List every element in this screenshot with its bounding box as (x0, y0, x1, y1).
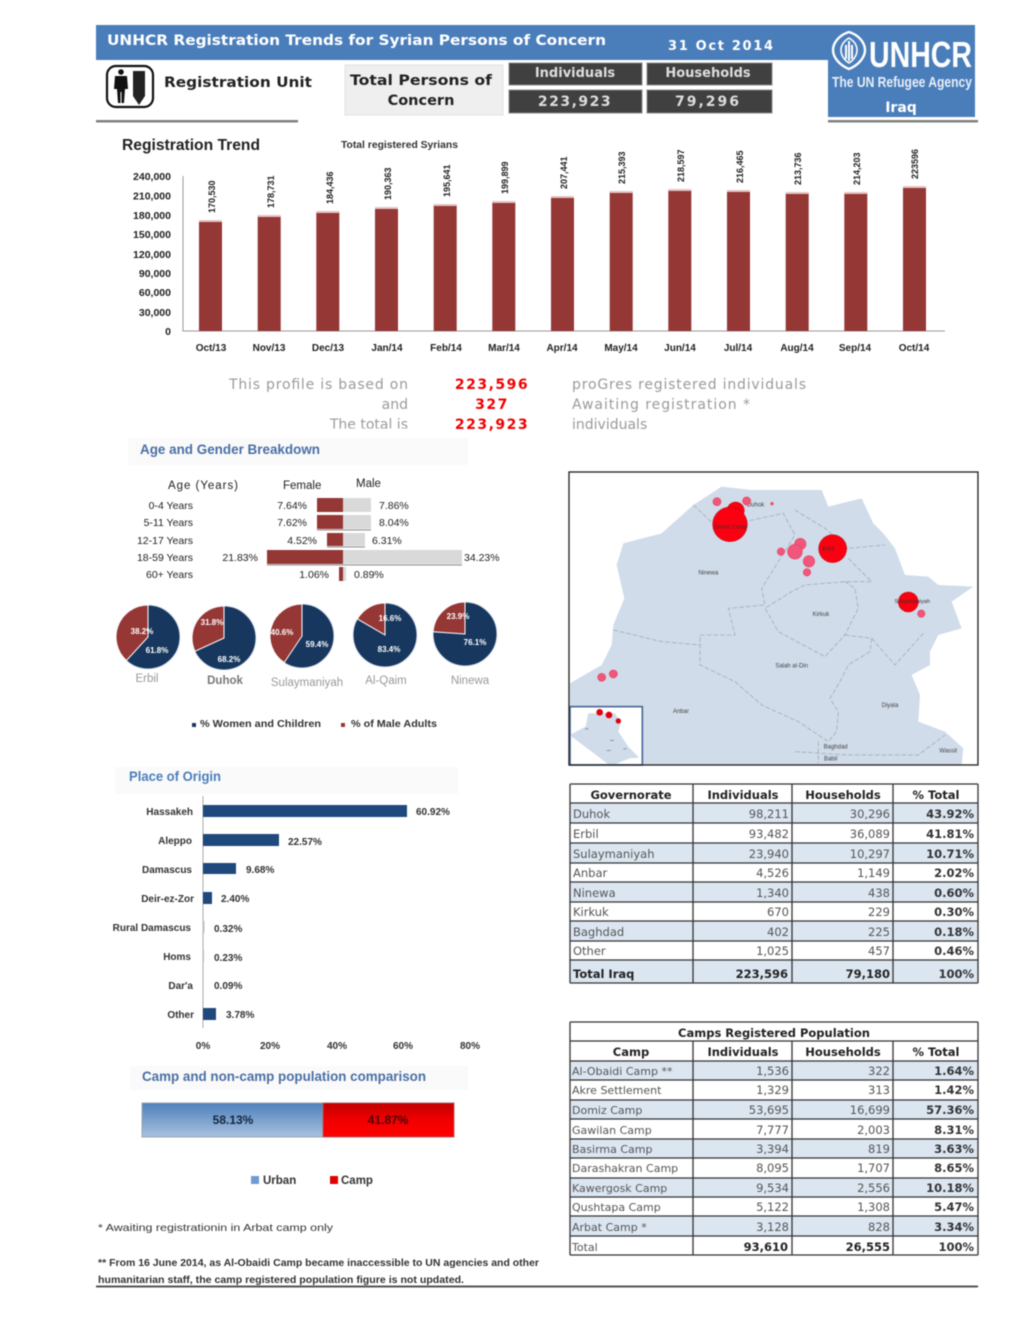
section heading: camp comparison: Camp and non-camp population comparison (142, 1068, 426, 1084)
pie: Sulaymaniyah: 59.4% (306, 640, 328, 649)
camp names: Gawilan Camp (572, 1124, 652, 1137)
households column: 2,556 (857, 1181, 890, 1195)
chart: camp vs urban stacked bar: 41.87% (368, 1113, 409, 1127)
individuals column: 93,610 (744, 1240, 788, 1254)
bar value labels: 184,436 (325, 171, 335, 204)
origin axis: 20% (260, 1041, 280, 1052)
header banner (96, 25, 975, 60)
total persons of concern box: Concern (388, 93, 454, 109)
refugee proportional circles: Sulaymaniyah (895, 599, 930, 605)
individuals column: 4,526 (756, 866, 789, 880)
column headers: Age (Years) (168, 480, 238, 492)
summary text block: 223,596 (455, 377, 529, 393)
x axis labels: Feb/14 (430, 343, 462, 354)
individuals column: 1,536 (756, 1064, 789, 1078)
header row: Households (805, 1045, 881, 1059)
table: camps (570, 1022, 978, 1255)
map place labels: Salah al-Din (775, 664, 808, 670)
camp names: Akre Settlement (572, 1084, 662, 1097)
bar value labels: 178,731 (266, 175, 276, 208)
percent column: 41.81% (926, 827, 974, 841)
individuals and households counters: Households (665, 66, 751, 81)
individuals and households counters: 223,923 (538, 94, 612, 110)
icon: UNHCR emblem (833, 32, 865, 69)
percent column: 3.63% (934, 1142, 974, 1156)
pie: Duhok: 68.2% (218, 655, 240, 664)
households column: 1,707 (857, 1161, 890, 1175)
pie: Duhok: Duhok (207, 675, 243, 687)
chart: registration trend (122, 137, 945, 354)
bar value labels: 199,899 (500, 161, 510, 194)
header row: Governorate (590, 788, 672, 802)
summary text block: proGres registered individuals (572, 377, 806, 393)
percent column: 1.64% (934, 1064, 974, 1078)
households column: 225 (868, 925, 890, 939)
households column: 79,180 (846, 967, 890, 981)
refugee proportional circles (598, 497, 930, 681)
header row (613, 1045, 959, 1059)
bar value labels (207, 149, 920, 213)
individuals column: 402 (767, 925, 789, 939)
map of Iraq (569, 472, 978, 765)
individuals column: 23,940 (749, 847, 789, 861)
pie: Erbil: 38.2% (131, 627, 153, 636)
stacked bar legend: Urban (263, 1175, 296, 1187)
households column: 828 (868, 1220, 890, 1234)
header row: Individuals (707, 1045, 779, 1059)
section heading: place of origin: Place of Origin (129, 768, 221, 784)
chart: age and gender pyramid (137, 478, 500, 581)
individuals column: 93,482 (749, 827, 789, 841)
percent column: 0.18% (934, 925, 974, 939)
bar value labels: 215,393 (617, 151, 627, 184)
header row: % Total (913, 1045, 959, 1059)
row stripes (570, 1061, 978, 1236)
pie: Ninewa: 76.1% (464, 638, 486, 647)
stacked bar legend (251, 1175, 373, 1187)
header row: % Total (913, 788, 959, 802)
table grid (570, 784, 978, 983)
pie: Sulaymaniyah: 40.6% (271, 628, 293, 637)
age labels (137, 500, 193, 581)
pie: Ninewa (433, 602, 497, 687)
households column: 10,297 (850, 847, 890, 861)
percent labels: 0.89% (354, 569, 384, 581)
governorate names: Total Iraq (573, 967, 634, 981)
footnotes: ** From 16 June 2014, as Al-Obaidi Camp became inaccessible to UN agencies and other (98, 1257, 539, 1269)
age labels: 12-17 Years (137, 535, 193, 547)
origin values: 0.32% (214, 924, 242, 935)
pie: Al-Qaim (353, 603, 417, 687)
origin labels (113, 807, 194, 1021)
camp names: Al-Obaidi Camp ** (572, 1065, 673, 1078)
households column: 819 (868, 1142, 890, 1156)
camp names: Domiz Camp (572, 1104, 642, 1117)
female bars (267, 498, 343, 581)
unit name: Registration Unit (164, 75, 312, 91)
y axis labels: 180,000 (133, 210, 171, 222)
origin values: 0.09% (214, 981, 242, 992)
percent column: 8.65% (934, 1161, 974, 1175)
individuals column (736, 807, 789, 981)
origin labels: Other (167, 1010, 194, 1021)
governorate names: Kirkuk (573, 905, 609, 919)
pie legend: % of Male Adults (351, 718, 437, 730)
map land area (570, 487, 973, 765)
governorate names: Other (573, 944, 606, 958)
refugee proportional circles: Erbil (823, 546, 834, 552)
chart: camp vs urban stacked bar: 58.13% (213, 1113, 254, 1127)
percent column: 0.30% (934, 905, 974, 919)
map place labels: Wassit (939, 749, 957, 755)
chart title: Registration Trend (122, 137, 260, 154)
age labels: 60+ Years (146, 569, 193, 581)
percent labels: 21.83% (222, 552, 258, 564)
households column: 229 (868, 905, 890, 919)
percent labels: 7.86% (379, 500, 409, 512)
x axis labels: Oct/13 (196, 343, 227, 354)
camp names: Basirma Camp (572, 1143, 652, 1156)
pie: Ninewa: Ninewa (451, 675, 490, 687)
households column: 438 (868, 886, 890, 900)
summary text block: and (382, 397, 408, 413)
origin labels: Homs (163, 952, 191, 963)
map place labels: Kirkuk (813, 612, 829, 618)
x axis labels: Dec/13 (312, 343, 345, 354)
individuals column: 5,122 (756, 1200, 789, 1214)
origin axis: 0% (196, 1041, 210, 1052)
section heading: age and gender: Age and Gender Breakdown (140, 441, 320, 457)
country label: Iraq (885, 100, 917, 116)
footnotes (98, 1222, 539, 1286)
footnotes: * Awaiting registrationin in Arbat camp only (98, 1222, 334, 1234)
x axis labels: Sep/14 (839, 343, 872, 354)
origin labels: Dar'a (168, 981, 193, 992)
individuals column: 7,777 (756, 1123, 789, 1137)
summary text block: This profile is based on (228, 377, 408, 393)
map place labels (673, 502, 957, 762)
summary text block (228, 377, 806, 433)
bar value labels: 213,736 (793, 152, 803, 185)
pie: Erbil: Erbil (135, 673, 159, 685)
pie: Ninewa: 23.9% (447, 612, 469, 621)
percent labels: 7.62% (277, 517, 307, 529)
header row (590, 788, 959, 802)
x axis labels: Aug/14 (780, 343, 814, 354)
percent column: 10.18% (926, 1181, 974, 1195)
bar value labels: 190,363 (383, 167, 393, 200)
percent column: 1.42% (934, 1083, 974, 1097)
governorate names: Anbar (573, 866, 608, 880)
y axis labels: 30,000 (139, 307, 171, 319)
camp names: Arbat Camp * (572, 1221, 647, 1234)
pie: Sulaymaniyah: Sulaymaniyah (271, 677, 343, 689)
map place labels: Duhok (747, 502, 764, 508)
households column: 2,003 (857, 1123, 890, 1137)
households column: 26,555 (846, 1240, 890, 1254)
origin labels: Rural Damascus (113, 923, 191, 934)
chart subtitle: Total registered Syrians (341, 140, 458, 151)
individuals column: 9,534 (756, 1181, 789, 1195)
percent column: 10.71% (926, 847, 974, 861)
origin labels: Aleppo (158, 836, 192, 847)
section heading: age and gender (128, 438, 468, 465)
bar top highlights (199, 186, 926, 222)
column headers: Male (356, 478, 381, 490)
header row: Individuals (707, 788, 779, 802)
individuals column: 670 (767, 905, 789, 919)
pie legend: % Women and Children (200, 718, 321, 730)
origin labels: Deir-ez-Zor (141, 894, 194, 905)
map place labels: Anbar (673, 709, 689, 715)
total persons of concern box (345, 65, 503, 115)
x axis labels: May/14 (604, 343, 638, 354)
origin values: 60.92% (416, 807, 450, 818)
x axis labels: Jun/14 (664, 343, 696, 354)
summary text block: Awaiting registration * (572, 397, 750, 413)
y axis labels: 240,000 (133, 171, 171, 183)
UNHCR logo block (828, 25, 975, 117)
report date: 31 Oct 2014 (668, 39, 773, 54)
pie charts by governorate (116, 602, 497, 730)
percent column: 5.47% (934, 1200, 974, 1214)
summary text block: 327 (475, 397, 509, 413)
households column: 30,296 (850, 807, 890, 821)
origin axis: 60% (393, 1041, 413, 1052)
header row: Households (805, 788, 881, 802)
individuals column: 1,025 (756, 944, 789, 958)
camp names: Total (571, 1241, 598, 1254)
percent labels: 4.52% (287, 535, 317, 547)
percent labels: 34.23% (464, 552, 500, 564)
map place labels: Baghdad (824, 745, 848, 751)
pie: Al-Qaim: 83.4% (378, 645, 400, 654)
households column: 313 (868, 1083, 890, 1097)
households column (846, 807, 890, 981)
governorate names: Sulaymaniyah (573, 847, 655, 861)
origin values: 0.23% (214, 953, 242, 964)
origin labels: Hassakeh (146, 807, 193, 818)
icon: person and pencil (107, 66, 153, 107)
percent column: 2.02% (934, 866, 974, 880)
origin bars (203, 805, 407, 1020)
households column: 36,089 (850, 827, 890, 841)
percent column: 0.46% (934, 944, 974, 958)
x axis labels: Apr/14 (546, 343, 578, 354)
origin values: 22.57% (288, 837, 322, 848)
governorate names (573, 807, 655, 981)
households column (846, 1064, 890, 1254)
x axis labels: Oct/14 (899, 343, 930, 354)
chart: camp vs urban stacked bar (142, 1103, 454, 1187)
y axis labels: 60,000 (139, 287, 171, 299)
individuals column: 8,095 (756, 1161, 789, 1175)
map place labels: Diyala (882, 703, 899, 709)
logo tagline: The UN Refugee Agency (832, 74, 973, 91)
map frame (569, 472, 978, 765)
summary text block: 223,923 (455, 417, 529, 433)
percent column (926, 807, 974, 981)
pie: Al-Qaim: Al-Qaim (365, 675, 407, 687)
y axis labels: 0 (165, 326, 171, 338)
logo wordmark: UNHCR (869, 34, 972, 75)
bars (199, 187, 926, 331)
section heading: camp comparison (130, 1066, 468, 1090)
individuals and households counters: Individuals (535, 66, 615, 81)
percent labels: 7.64% (277, 500, 307, 512)
bar value labels: 170,530 (207, 180, 217, 213)
summary text block: individuals (572, 417, 647, 433)
pie: Al-Qaim: 16.6% (379, 614, 401, 623)
chart: place of origin (113, 796, 480, 1052)
bar value labels: 218,597 (676, 149, 686, 182)
individuals column: 3,128 (756, 1220, 789, 1234)
individuals column: 1,340 (756, 886, 789, 900)
x axis labels (196, 343, 930, 354)
origin axis: 40% (327, 1041, 347, 1052)
origin axis (196, 1041, 480, 1052)
individuals column: 98,211 (749, 807, 789, 821)
footnotes: humanitarian staff, the camp registered population figure is not updated. (98, 1274, 464, 1286)
pie: Erbil (116, 605, 180, 685)
origin values: 3.78% (226, 1010, 254, 1021)
households column: 1,149 (857, 866, 890, 880)
camp names: Kawergosk Camp (572, 1182, 667, 1195)
y axis labels: 120,000 (133, 249, 171, 261)
summary text block: The total is (329, 417, 408, 433)
origin labels: Damascus (142, 865, 192, 876)
percent labels: 1.06% (299, 569, 329, 581)
refugee proportional circles: Domiz Camp (714, 524, 747, 530)
pie: Duhok: 31.8% (201, 618, 223, 627)
total persons of concern box: Total Persons of (350, 73, 493, 89)
pie: Duhok (192, 606, 256, 687)
table grid (570, 1022, 978, 1255)
individuals and households counters (509, 63, 772, 113)
bar value labels: 195,641 (442, 164, 452, 197)
households column: 322 (868, 1064, 890, 1078)
governorate names: Baghdad (573, 925, 624, 939)
camp names (571, 1065, 678, 1254)
age labels: 18-59 Years (137, 552, 193, 564)
households column: 1,308 (857, 1200, 890, 1214)
governorate borders (613, 505, 945, 763)
y axis labels: 90,000 (139, 268, 171, 280)
map place labels: Babil (824, 756, 837, 762)
percent column: 43.92% (926, 807, 974, 821)
governorate names: Erbil (573, 827, 599, 841)
age labels: 0-4 Years (149, 500, 193, 512)
report title: UNHCR Registration Trends for Syrian Persons of Concern (107, 33, 606, 49)
x axis labels: Mar/14 (488, 343, 520, 354)
governorate names: Duhok (573, 807, 610, 821)
origin values: 9.68% (246, 865, 274, 876)
header row: Camp (613, 1045, 649, 1059)
pie: Erbil: 61.8% (146, 646, 168, 655)
bar value labels: 214,203 (852, 152, 862, 185)
origin axis: 80% (460, 1041, 480, 1052)
x axis labels: Jul/14 (724, 343, 753, 354)
percent column: 100% (938, 967, 974, 981)
individuals column: 3,394 (756, 1142, 789, 1156)
origin values: 2.40% (221, 894, 249, 905)
section heading: place of origin (115, 767, 458, 794)
individuals and households counters: 79,296 (675, 94, 741, 110)
camp names: Qushtapa Camp (572, 1201, 661, 1214)
individuals column: 1,329 (756, 1083, 789, 1097)
map inset (570, 707, 642, 765)
percent column: 57.36% (926, 1103, 974, 1117)
pie: Sulaymaniyah (270, 604, 343, 689)
bar value labels: 216,465 (735, 150, 745, 183)
column headers (168, 478, 381, 492)
origin values (214, 807, 450, 1021)
table: governorates (570, 784, 978, 983)
y axis labels: 150,000 (133, 229, 171, 241)
percent column: 8.31% (934, 1123, 974, 1137)
percent column (926, 1064, 974, 1254)
column headers: Female (283, 480, 321, 492)
stacked bar legend: Camp (341, 1175, 373, 1187)
male bars (343, 498, 462, 581)
percent column: 100% (938, 1240, 974, 1254)
percent column: 0.60% (934, 886, 974, 900)
bar value labels: 223596 (910, 149, 920, 179)
table title: Camps Registered Population (678, 1026, 870, 1040)
governorate names: Ninewa (573, 886, 616, 900)
bar value labels: 207,441 (559, 156, 569, 189)
individuals column (744, 1064, 789, 1254)
x axis labels: Nov/13 (253, 343, 286, 354)
households column: 16,699 (850, 1103, 890, 1117)
y axis labels: 210,000 (133, 190, 171, 202)
percent labels: 6.31% (372, 535, 402, 547)
age labels: 5-11 Years (144, 517, 193, 529)
percent column: 3.34% (934, 1220, 974, 1234)
percent labels (222, 500, 500, 581)
registration unit heading (107, 66, 312, 107)
individuals column: 53,695 (749, 1103, 789, 1117)
y axis labels (133, 171, 171, 338)
percent labels: 8.04% (379, 517, 409, 529)
x axis labels: Jan/14 (371, 343, 403, 354)
individuals column: 223,596 (736, 967, 788, 981)
camp names: Darashakran Camp (572, 1162, 678, 1175)
pie legend (192, 718, 437, 730)
households column: 457 (868, 944, 890, 958)
row stripes (570, 803, 978, 983)
map place labels: Ninewa (698, 570, 719, 576)
